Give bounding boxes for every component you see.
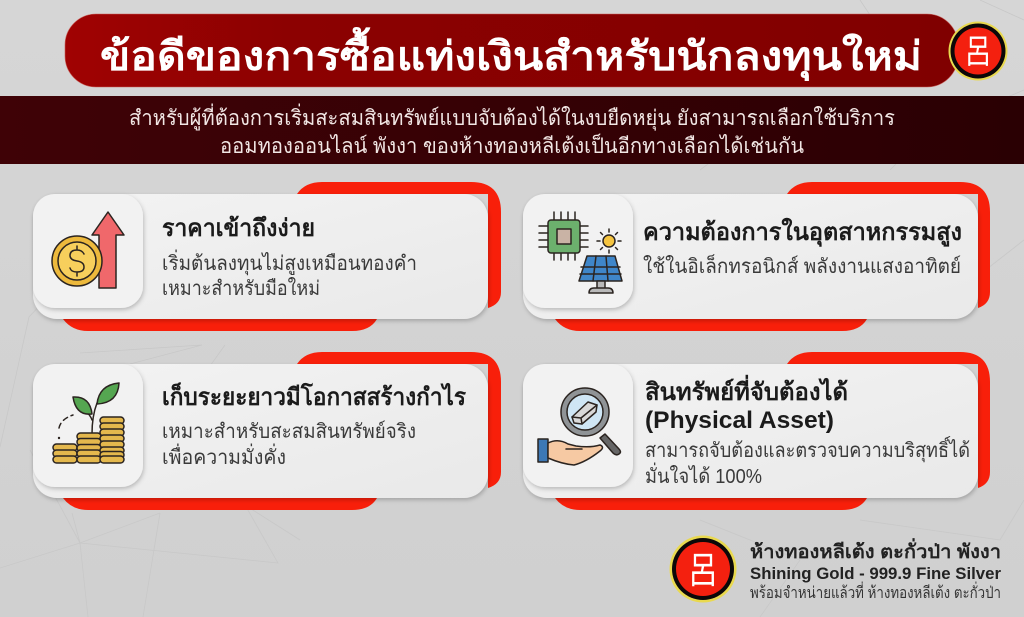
description: เหมาะสำหรับสะสมสินทรัพย์จริง xyxy=(162,420,416,443)
description: เหมาะสำหรับมือใหม่ xyxy=(162,277,320,300)
description: ใช้ในอิเล็กทรอนิกส์ พลังงานแสงอาทิตย์ xyxy=(643,253,961,278)
description xyxy=(162,420,416,469)
panel: affordable price xyxy=(33,182,501,331)
heading: สินทรัพย์ที่จับต้องได้ xyxy=(645,374,848,406)
logo: footer badge: 呂 xyxy=(688,540,718,594)
icon: hand and magnifier over silver bar xyxy=(538,388,620,465)
logo: footer badge xyxy=(670,536,736,602)
logo: header badge xyxy=(948,22,1008,80)
heading: (Physical Asset) xyxy=(645,407,834,434)
panel: industrial demand xyxy=(523,182,990,331)
description: มั่นใจได้ 100% xyxy=(645,462,762,488)
footer shop details: ห้างทองหลีเต้ง ตะกั่วป่า พังงา xyxy=(750,538,1001,563)
heading xyxy=(645,374,848,434)
description: สามารถจับต้องและตรวจบความบริสุทธิ์ได้ xyxy=(645,435,970,463)
footer shop details xyxy=(750,538,1001,602)
intro text: สำหรับผู้ที่ต้องการเริ่มสะสมสินทรัพย์แบบจับต้องได้ในงบยืดหยุ่น ยังสามารถเลือกใช้บริการ xyxy=(129,103,895,131)
footer shop details: Shining Gold - 999.9 Fine Silver xyxy=(750,564,1001,583)
intro text: ออมทองออนไลน์ พังงา ของห้างทองหลีเต้งเป็นอีกทางเลือกได้เช่นกัน xyxy=(220,132,804,158)
panel: physical asset xyxy=(523,352,990,510)
heading: เก็บระยะยาวมีโอกาสสร้างกำไร xyxy=(162,382,466,411)
title text: ข้อดีของการซื้อแท่งเงินสำหรับนักลงทุนใหม่ xyxy=(100,27,922,82)
description xyxy=(162,249,417,300)
description: เริ่มต้นลงทุนไม่สูงเหมือนทองคำ xyxy=(162,249,417,276)
description xyxy=(645,435,970,488)
icon: coin and rising arrow xyxy=(52,212,124,288)
panel: long-term profit xyxy=(33,352,501,510)
description: เพื่อความมั่งคั่ง xyxy=(162,443,286,469)
intro text xyxy=(129,103,895,158)
logo: header badge: 呂 xyxy=(965,24,991,73)
heading: ราคาเข้าถึงง่าย xyxy=(162,215,315,242)
title banner xyxy=(65,14,958,87)
icon: chip, sun and solar panel xyxy=(539,212,622,293)
icon: coin stacks and sprout xyxy=(53,383,124,463)
intro band xyxy=(0,96,1024,164)
heading: ความต้องการในอุตสาหกรรมสูง xyxy=(643,217,962,248)
